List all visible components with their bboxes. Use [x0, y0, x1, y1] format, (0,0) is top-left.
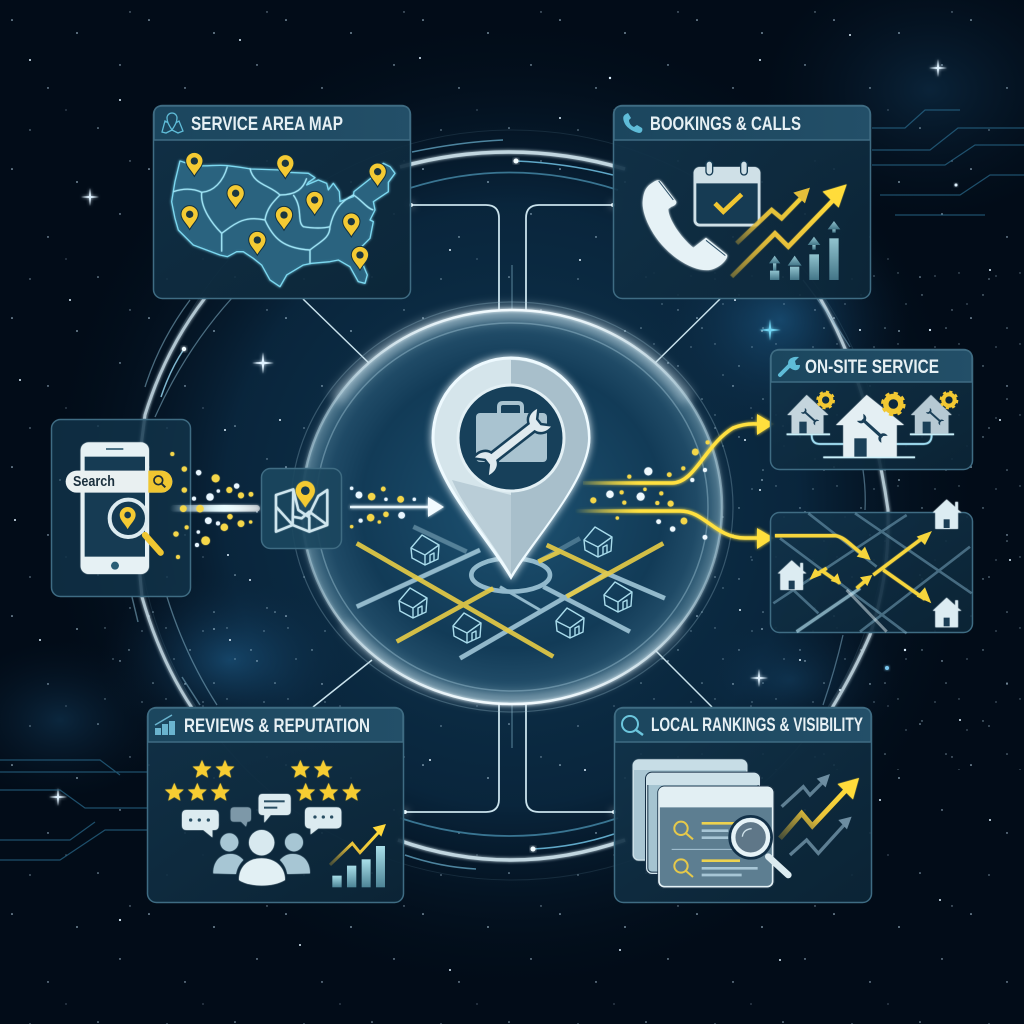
speech bubbles: [182, 794, 341, 837]
heading: LOCAL RANKINGS & VISIBILITY: [651, 715, 863, 736]
icon: phone: [623, 113, 642, 133]
phone icon: [81, 442, 149, 574]
rising arrows: [732, 198, 833, 277]
particles and beam: [170, 452, 416, 559]
big magnifier: [730, 816, 788, 875]
stream particles: [590, 440, 710, 540]
panel: on-site service: [770, 350, 972, 470]
arrow to pin: [350, 497, 444, 517]
people: [213, 830, 310, 885]
panel: routes: [770, 499, 972, 633]
main location pin: [433, 358, 589, 577]
icon: map pin: [162, 113, 183, 133]
icon: wrench: [780, 357, 800, 375]
panel: phone search: [52, 420, 190, 596]
stars: [165, 760, 361, 801]
arrowheads: [757, 414, 774, 549]
yellow roads: [357, 543, 663, 657]
stacked result windows: [633, 760, 773, 887]
US map: [172, 152, 395, 287]
growth chart: [332, 846, 385, 887]
heading: SERVICE AREA MAP: [191, 114, 343, 135]
bottom arcs: [398, 840, 625, 860]
street map in sphere: [357, 527, 665, 658]
pin emblem: [458, 385, 564, 491]
blue roads: [357, 527, 665, 658]
heading: ON-SITE SERVICE: [805, 357, 939, 378]
right arcs: [820, 298, 888, 708]
search label: Search: [73, 473, 115, 490]
panel: bookings and calls: [614, 106, 870, 298]
central sphere: [291, 302, 733, 712]
panel: service area map: [154, 106, 410, 298]
panel: local rankings and visibility: [614, 708, 872, 902]
icon: magnifier: [622, 716, 643, 735]
calendar: [695, 161, 759, 225]
heading: REVIEWS & REPUTATION: [184, 716, 370, 737]
neighbourhood houses: [399, 527, 632, 643]
roads: [773, 513, 972, 633]
houses with gears: [787, 392, 957, 457]
heading: BOOKINGS & CALLS: [650, 114, 801, 135]
destination houses: [778, 499, 961, 627]
icon: bars: [155, 715, 175, 735]
top arcs: [400, 152, 625, 169]
map pins: [181, 152, 386, 270]
panel: reviews and reputation: [148, 708, 404, 902]
outer orbit rings: [132, 130, 888, 880]
left arcs: [138, 298, 205, 708]
map tile: [262, 468, 342, 548]
handset: [643, 180, 727, 270]
search bar: [66, 471, 172, 493]
result rows: [674, 822, 693, 877]
magnifier with pin: [110, 500, 161, 553]
yellow routes: [775, 535, 927, 599]
small bars: [769, 221, 840, 280]
connector lines: [303, 203, 720, 814]
trend arrows: [780, 780, 847, 855]
gold streams: [575, 424, 758, 538]
